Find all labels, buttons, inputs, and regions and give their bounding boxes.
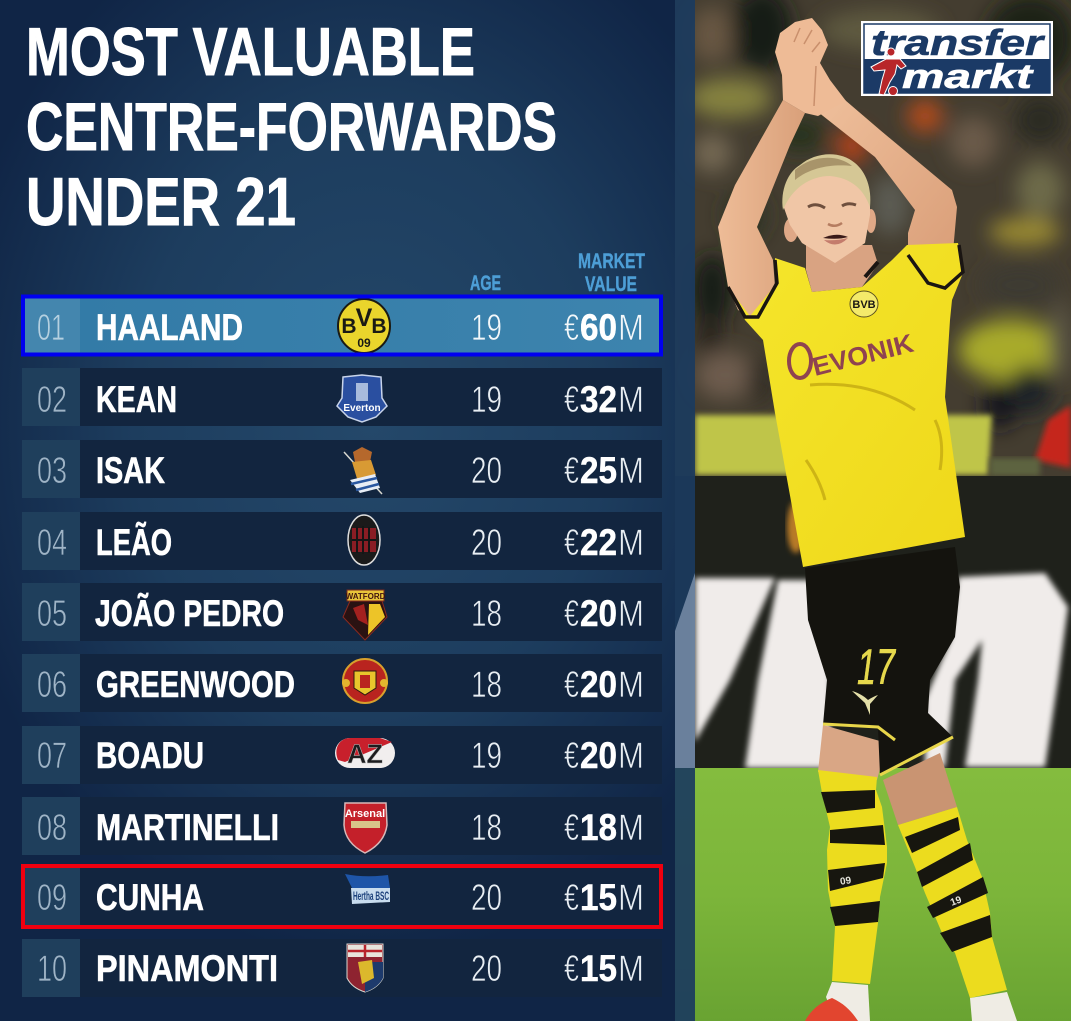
- row 05 João Pedro: €: [564, 593, 579, 634]
- dark advertising board with white lettering: [675, 476, 1071, 772]
- player figure: [718, 18, 1017, 1021]
- icon: Everton crest: [337, 375, 387, 422]
- clapping hands: [775, 18, 846, 116]
- icon: Manchester United crest: [342, 659, 388, 703]
- icon: AZ Alkmaar crest: [335, 738, 395, 769]
- row 08 Martinelli: 08: [37, 807, 67, 848]
- blond hair: [782, 154, 870, 210]
- row 04 Leão: 04: [37, 522, 67, 563]
- icon: Arsenal crest: Arsenal: [345, 808, 385, 820]
- logo footballer figure: [871, 48, 906, 96]
- translucent strip between panel and photo: [675, 0, 695, 1021]
- icon: Everton crest: Everton: [343, 403, 381, 414]
- shorts: [805, 547, 960, 775]
- row 01 Haaland: 19: [471, 307, 502, 348]
- row 05 João Pedro: 20: [580, 593, 617, 634]
- shirt number: 17: [857, 639, 896, 695]
- row 02 Kean: KEAN: [96, 379, 177, 420]
- row 01 Haaland: 01: [37, 307, 65, 348]
- icon: Dortmund crest: 09: [357, 336, 371, 350]
- row 08 Martinelli: 18: [580, 807, 617, 848]
- row 03 Isak: M: [618, 450, 644, 491]
- left navy panel: [0, 0, 675, 1021]
- row 03 Isak: 25: [580, 450, 617, 491]
- head: [782, 154, 876, 263]
- row 08 Martinelli: [22, 797, 662, 855]
- kit maker logo: [852, 691, 878, 715]
- row 06 Greenwood: 06: [37, 664, 67, 705]
- sponsor wordmark: EVONIK: [809, 328, 917, 382]
- row 06 Greenwood: €: [564, 664, 579, 705]
- jersey club badge: BVB: [852, 299, 876, 311]
- row 07 Boadu: 19: [471, 735, 502, 776]
- row 02 Kean: 32: [580, 379, 617, 420]
- row 03 Isak: €: [564, 450, 579, 491]
- row 09 Cunha: [22, 866, 662, 927]
- yellow jersey: [728, 243, 965, 567]
- row 08 Martinelli: M: [618, 807, 644, 848]
- icon: Watford crest: [343, 590, 387, 640]
- row 01 Haaland: 60: [580, 307, 617, 348]
- logo word: markt: markt: [902, 58, 1034, 96]
- row 02 Kean: 02: [37, 379, 67, 420]
- photo: Haaland applauding in the stadium: [675, 0, 1071, 1021]
- row 10 Pinamonti: 15: [580, 948, 617, 989]
- ranking table: [22, 297, 662, 997]
- row 05 João Pedro: JOÃO PEDRO: [95, 592, 284, 634]
- row 07 Boadu: 07: [37, 735, 67, 776]
- row 10 Pinamonti: 20: [471, 948, 502, 989]
- row 03 Isak: ISAK: [96, 450, 165, 491]
- row 02 Kean: €: [564, 379, 579, 420]
- left arm raised: [718, 100, 805, 317]
- icon: Dortmund crest: B: [371, 315, 387, 338]
- title: CENTRE-FORWARDS: [26, 89, 557, 165]
- icon: Hertha BSC flag: Hertha BSC: [353, 889, 389, 903]
- row 03 Isak: [22, 440, 662, 498]
- stadium crowd background: [675, 0, 1071, 480]
- title: UNDER 21: [26, 164, 296, 240]
- sock number: 19: [949, 894, 964, 909]
- row 07 Boadu: 20: [580, 735, 617, 776]
- row 09 Cunha: €: [564, 877, 579, 918]
- Transfermarkt logo: [861, 21, 1053, 96]
- row 03 Isak: 03: [37, 450, 67, 491]
- left leg and sock: [805, 725, 887, 1021]
- row 05 João Pedro: [22, 583, 662, 641]
- row 05 João Pedro: 18: [471, 593, 502, 634]
- row 01 Haaland: [22, 297, 662, 355]
- row 05 João Pedro: M: [618, 593, 644, 634]
- row 08 Martinelli: 18: [471, 807, 502, 848]
- column headers: VALUE: [585, 273, 637, 296]
- row 04 Leão: [22, 512, 662, 570]
- icon: Arsenal crest: [344, 803, 387, 853]
- logo word: transfer: transfer: [871, 22, 1046, 63]
- row 10 Pinamonti: €: [564, 948, 579, 989]
- row 10 Pinamonti: [22, 939, 662, 997]
- row 07 Boadu: [22, 726, 662, 784]
- row 04 Leão: 22: [580, 522, 617, 563]
- row 02 Kean: [22, 368, 662, 426]
- row 09 Cunha: 15: [580, 877, 617, 918]
- red highlight frame around Cunha: [23, 866, 661, 927]
- icon: Watford crest: WATFORD: [346, 592, 386, 601]
- row 01 Haaland: €: [564, 307, 579, 348]
- row 06 Greenwood: [22, 654, 662, 712]
- row 01 Haaland: HAALAND: [96, 307, 243, 348]
- row 05 João Pedro: 05: [37, 593, 67, 634]
- right leg and sock: [883, 753, 1017, 1021]
- row 03 Isak: 20: [471, 450, 502, 491]
- row 08 Martinelli: MARTINELLI: [96, 807, 279, 848]
- row 04 Leão: LEÃO: [96, 521, 172, 563]
- row 04 Leão: €: [564, 522, 579, 563]
- icon: Real Sociedad crest: [344, 447, 382, 494]
- grass pitch: [675, 768, 1071, 1021]
- column headers: [470, 250, 645, 296]
- row 01 Haaland: M: [618, 307, 644, 348]
- row 02 Kean: M: [618, 379, 644, 420]
- icon: Dortmund crest: B: [341, 315, 357, 338]
- row 06 Greenwood: GREENWOOD: [96, 664, 295, 705]
- row 02 Kean: 19: [471, 379, 502, 420]
- icon: Hertha BSC flag: [345, 874, 390, 904]
- icon: Dortmund crest: [338, 299, 390, 353]
- row 09 Cunha: M: [618, 877, 644, 918]
- right arm raised: [821, 100, 957, 245]
- row 10 Pinamonti: M: [618, 948, 644, 989]
- blue highlight frame around Haaland: [23, 296, 661, 354]
- title: [26, 14, 557, 240]
- row 09 Cunha: 20: [471, 877, 502, 918]
- row 10 Pinamonti: PINAMONTI: [96, 948, 278, 989]
- icon: AZ Alkmaar crest: AZ: [347, 739, 383, 769]
- column headers: AGE: [470, 272, 501, 295]
- title: MOST VALUABLE: [26, 14, 475, 90]
- row 06 Greenwood: 20: [580, 664, 617, 705]
- red spectator blob: [1035, 405, 1071, 468]
- sock number: 09: [839, 875, 852, 888]
- icon: AC Milan crest: [348, 515, 380, 565]
- row 06 Greenwood: M: [618, 664, 644, 705]
- neck: [806, 245, 878, 292]
- yellow advertising band: [695, 415, 992, 475]
- row 10 Pinamonti: 10: [37, 948, 67, 989]
- icon: Dortmund crest: V: [356, 304, 373, 332]
- row 09 Cunha: CUNHA: [96, 877, 204, 918]
- row 04 Leão: M: [618, 522, 644, 563]
- row 07 Boadu: BOADU: [96, 735, 204, 776]
- row 09 Cunha: 09: [37, 877, 67, 918]
- row 07 Boadu: M: [618, 735, 644, 776]
- row 06 Greenwood: 18: [471, 664, 502, 705]
- jersey club badge: [850, 291, 878, 317]
- row 04 Leão: 20: [471, 522, 502, 563]
- row 07 Boadu: €: [564, 735, 579, 776]
- column headers: MARKET: [578, 250, 645, 273]
- row 08 Martinelli: €: [564, 807, 579, 848]
- icon: Genoa crest: [347, 944, 383, 992]
